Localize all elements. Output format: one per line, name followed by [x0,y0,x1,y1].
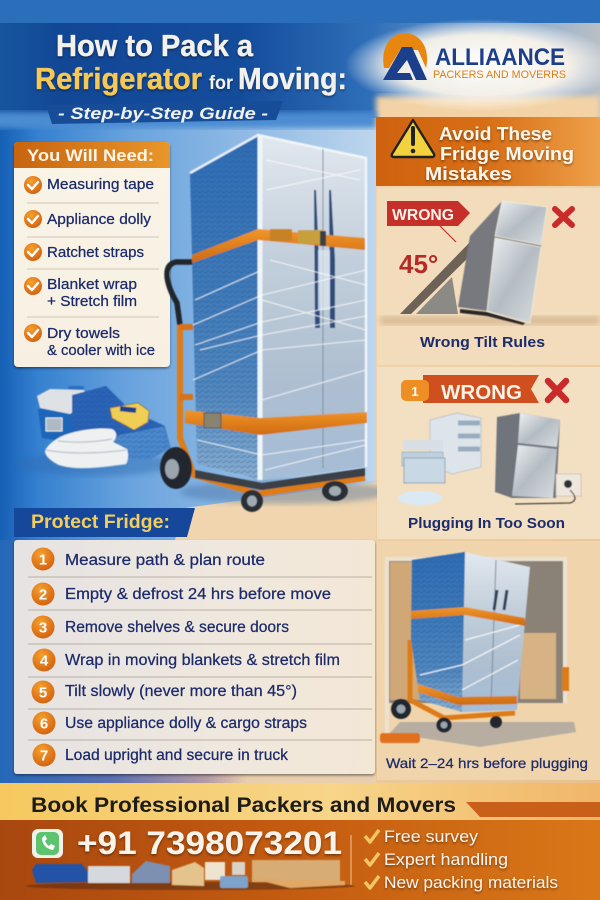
list items: Blanket wrap [47,277,137,293]
logo [383,33,566,81]
list items: Appliance dolly [47,212,152,228]
list items: & cooler with ice [47,343,155,359]
wrong tag: WRONG [392,207,454,224]
list items: Dry towels [47,326,120,342]
check marks [365,830,379,888]
illustration: wrapped fridge on dolly [160,135,390,512]
cooler [37,386,90,443]
towels [45,428,128,468]
truck interior [380,559,576,747]
steps: Load upright and secure in truck [65,747,288,764]
stretch film streaks [193,160,366,470]
icon: warning triangle [392,120,434,157]
number badges: 5 [39,684,47,702]
panel: plugging in too soon [377,367,600,539]
list items: Ratchet straps [47,245,144,261]
steps: Tilt slowly (never more than 45°) [65,683,297,700]
blanket [72,386,171,460]
panel: mistakes header [376,117,600,186]
ice puddle [398,491,442,505]
benefits: Expert handling [384,851,508,869]
45 degrees label: 45° [399,249,438,279]
check icons [24,176,42,342]
number badges: 7 [40,748,48,764]
icon: red cross [548,381,566,400]
straps [411,607,525,705]
footer headline band [0,783,600,821]
panel header [14,508,195,537]
subtitle ribbon [46,101,283,124]
icon: red cross [555,209,572,225]
footer contact band [0,820,600,900]
panel: you will need [14,142,170,367]
steps: Remove shelves & secure doors [65,619,289,636]
caption: Plugging In Too Soon [408,516,565,532]
wrong ribbon: 1 [411,384,419,399]
title: for [209,73,234,94]
steps [65,552,340,764]
steps: Wrap in moving blankets & stretch film [65,652,340,669]
footer contact band: +91 7398073201 [77,825,342,861]
benefits: New packing materials [384,874,558,892]
packing goods [25,860,355,890]
benefits: Free survey [384,828,479,846]
panel header: You Will Need: [27,146,154,165]
panel header [14,142,170,168]
logo mark [383,33,427,80]
fridge body [190,135,366,480]
fridge and plug [495,413,581,504]
caption: Wait 2–24 hrs before plugging [386,755,588,771]
list items: Measuring tape [47,177,154,193]
wheels [160,447,348,512]
shelves and drawers [402,413,481,483]
logo: PACKERS AND MOVERRS [433,69,566,81]
fridge on dolly [391,552,530,732]
list items [47,177,155,359]
number badges [32,548,56,766]
ramp [400,240,478,314]
number badges: 4 [40,652,49,670]
footer headline band: Book Professional Packers and Movers [31,794,456,817]
title: Moving: [238,61,347,96]
caption: Wrong Tilt Rules [420,335,545,351]
number badges: 3 [39,620,47,636]
number badges: 1 [39,552,47,568]
logo: ALLIAANCE [435,44,565,71]
panel: mistakes header: Mistakes [425,164,512,184]
upper strap [192,229,365,263]
steps: Empty & defrost 24 hrs before move [65,586,331,603]
benefits [384,828,558,892]
lower strap [185,410,367,435]
wrong ribbon [401,375,539,404]
panel header: Protect Fridge: [31,512,170,533]
subtitle ribbon: - Step-by-Step Guide - [58,104,268,123]
wrong tag [387,201,470,242]
number badges: 2 [39,586,47,604]
list items: + Stretch film [47,294,137,310]
panel: wrong tilt [377,188,600,365]
panel: mistakes header: Fridge Moving [440,144,574,164]
title: Refrigerator [35,61,202,96]
steps: Use appliance dolly & cargo straps [65,715,307,732]
dolly [160,262,365,512]
panel: wait before plugging [377,541,600,780]
title [35,28,347,96]
panel: protect fridge [14,508,375,774]
number badges: 6 [40,716,48,732]
footer [0,783,600,900]
icon: whatsapp [32,829,63,858]
wrong ribbon: WRONG [441,382,522,404]
panel: mistakes header: Avoid These [439,124,552,144]
title: How to Pack a [56,28,254,63]
illustration: blanket, cooler and towels [17,386,173,476]
tilted fridge [458,201,547,325]
steps: Measure path & plan route [65,552,265,569]
